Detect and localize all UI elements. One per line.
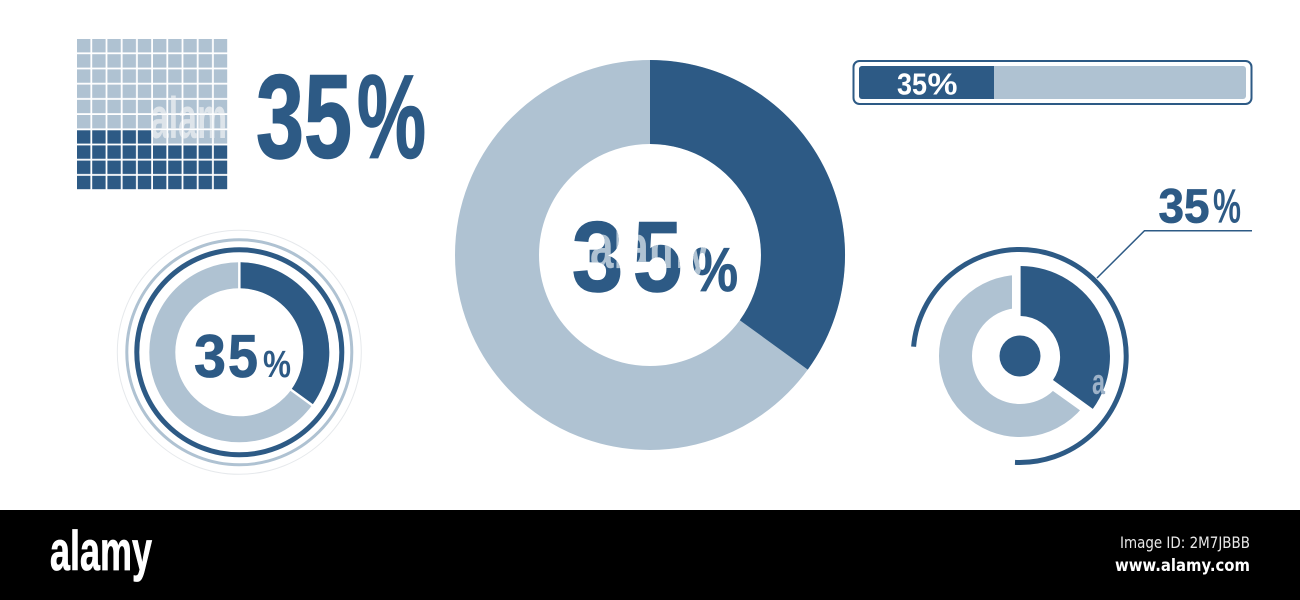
centre value: 5 [228, 323, 258, 390]
centre value [572, 201, 738, 312]
waffle grid: alam [150, 86, 227, 151]
segment gaps [239, 258, 314, 406]
leader line [1097, 231, 1252, 278]
gap mask [1012, 262, 1100, 425]
panel: large centre donut [497, 60, 845, 408]
value label: 35 [1158, 180, 1210, 234]
footer bar [0, 510, 1300, 600]
bar value: % [928, 66, 958, 102]
donut remainder [162, 275, 316, 429]
light ring [127, 240, 352, 465]
centre value: 3 [194, 323, 226, 390]
donut remainder [956, 292, 1084, 420]
panel: ringed donut bottom left [117, 230, 361, 474]
donut 35% segment [650, 60, 845, 370]
bar value [897, 66, 958, 102]
outer thin ring [117, 230, 361, 474]
centre value: % [263, 344, 291, 386]
bar frame [854, 61, 1252, 104]
panel: progress bar [854, 61, 1252, 104]
bar fill 35% [859, 66, 994, 99]
value label [1158, 180, 1241, 234]
dark ring [137, 250, 342, 455]
footer logo: alamy [50, 519, 152, 582]
big figure 35%: % [357, 50, 426, 184]
waffle grid [77, 39, 229, 191]
centre value: alamy [590, 213, 710, 282]
centre dot [1000, 336, 1040, 376]
bar value: 35 [897, 66, 927, 102]
centre value: % [692, 236, 738, 305]
image id: Image ID: 2M7JBBB [1120, 533, 1250, 552]
donut remainder [497, 102, 803, 408]
centre value: 5 [633, 201, 682, 312]
donut 35% segment [241, 262, 329, 405]
donut 35% segment [1021, 266, 1110, 409]
watermark letter: a [1092, 361, 1106, 402]
big figure 35%: 35 [256, 50, 352, 184]
panel: callout donut right [914, 180, 1252, 463]
value label: % [1213, 180, 1241, 234]
bar track [859, 66, 1246, 99]
centre value [194, 323, 291, 390]
outer arc [914, 250, 1126, 463]
website: www.alamy.com [1115, 556, 1250, 576]
panel: waffle chart with 35% [77, 39, 426, 191]
centre value: 3 [572, 201, 623, 312]
